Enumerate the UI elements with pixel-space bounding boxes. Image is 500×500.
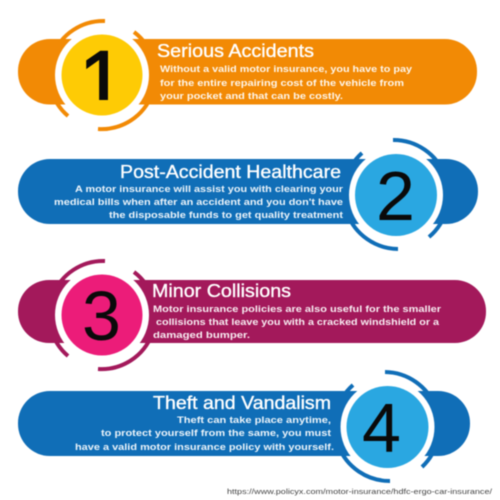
badge 2 bbox=[344, 140, 448, 249]
panel: minor collisions bbox=[18, 261, 486, 369]
orange bar bbox=[18, 39, 477, 104]
panel: serious accidents bbox=[18, 21, 477, 129]
body text: your pocket and that can be costly. bbox=[160, 91, 343, 102]
heading: Minor Collisions bbox=[152, 281, 291, 301]
body text bbox=[153, 304, 441, 341]
body text bbox=[54, 184, 344, 221]
heading: Post-Accident Healthcare bbox=[120, 162, 341, 182]
badge 1 bbox=[49, 21, 155, 129]
panel: post-accident healthcare bbox=[18, 140, 478, 249]
body text: to protect yourself from the same, you must bbox=[101, 428, 332, 439]
body text: Motor insurance policies are also useful for the smaller bbox=[153, 304, 441, 315]
source url: https://www.policyx.com/motor-insurance/hdfc-ergo-car-insurance/ bbox=[227, 487, 493, 496]
body text bbox=[160, 64, 413, 102]
badge 3: 3 bbox=[82, 277, 121, 355]
badge 4: 4 bbox=[362, 389, 401, 467]
purple bar bbox=[18, 280, 486, 343]
badge 3 bbox=[49, 261, 155, 369]
badge 2: 2 bbox=[376, 157, 415, 235]
body text: Without a valid motor insurance, you have to pay bbox=[160, 64, 413, 75]
body text: the disposable funds to get quality treatment bbox=[109, 210, 344, 221]
badge 1: 1 bbox=[79, 34, 125, 126]
body text: medical bills when after an accident and you don't have bbox=[54, 197, 343, 208]
panel: theft and vandalism bbox=[18, 372, 470, 481]
badge 4 bbox=[335, 372, 439, 481]
body text bbox=[75, 415, 334, 453]
blue bar bbox=[18, 391, 470, 456]
body text: have a valid motor insurance policy with yourself. bbox=[75, 442, 334, 453]
body text: for the entire repairing cost of the vehicle from bbox=[160, 78, 404, 89]
blue bar bbox=[18, 159, 478, 224]
body text: damaged bumper. bbox=[153, 330, 250, 341]
body text: A motor insurance will assist you with clearing your bbox=[75, 184, 343, 195]
body text: collisions that leave you with a cracked windshield or a bbox=[156, 317, 440, 328]
heading: Serious Accidents bbox=[157, 41, 314, 61]
heading: Theft and Vandalism bbox=[153, 393, 331, 413]
body text: Theft can take place anytime, bbox=[177, 415, 331, 426]
